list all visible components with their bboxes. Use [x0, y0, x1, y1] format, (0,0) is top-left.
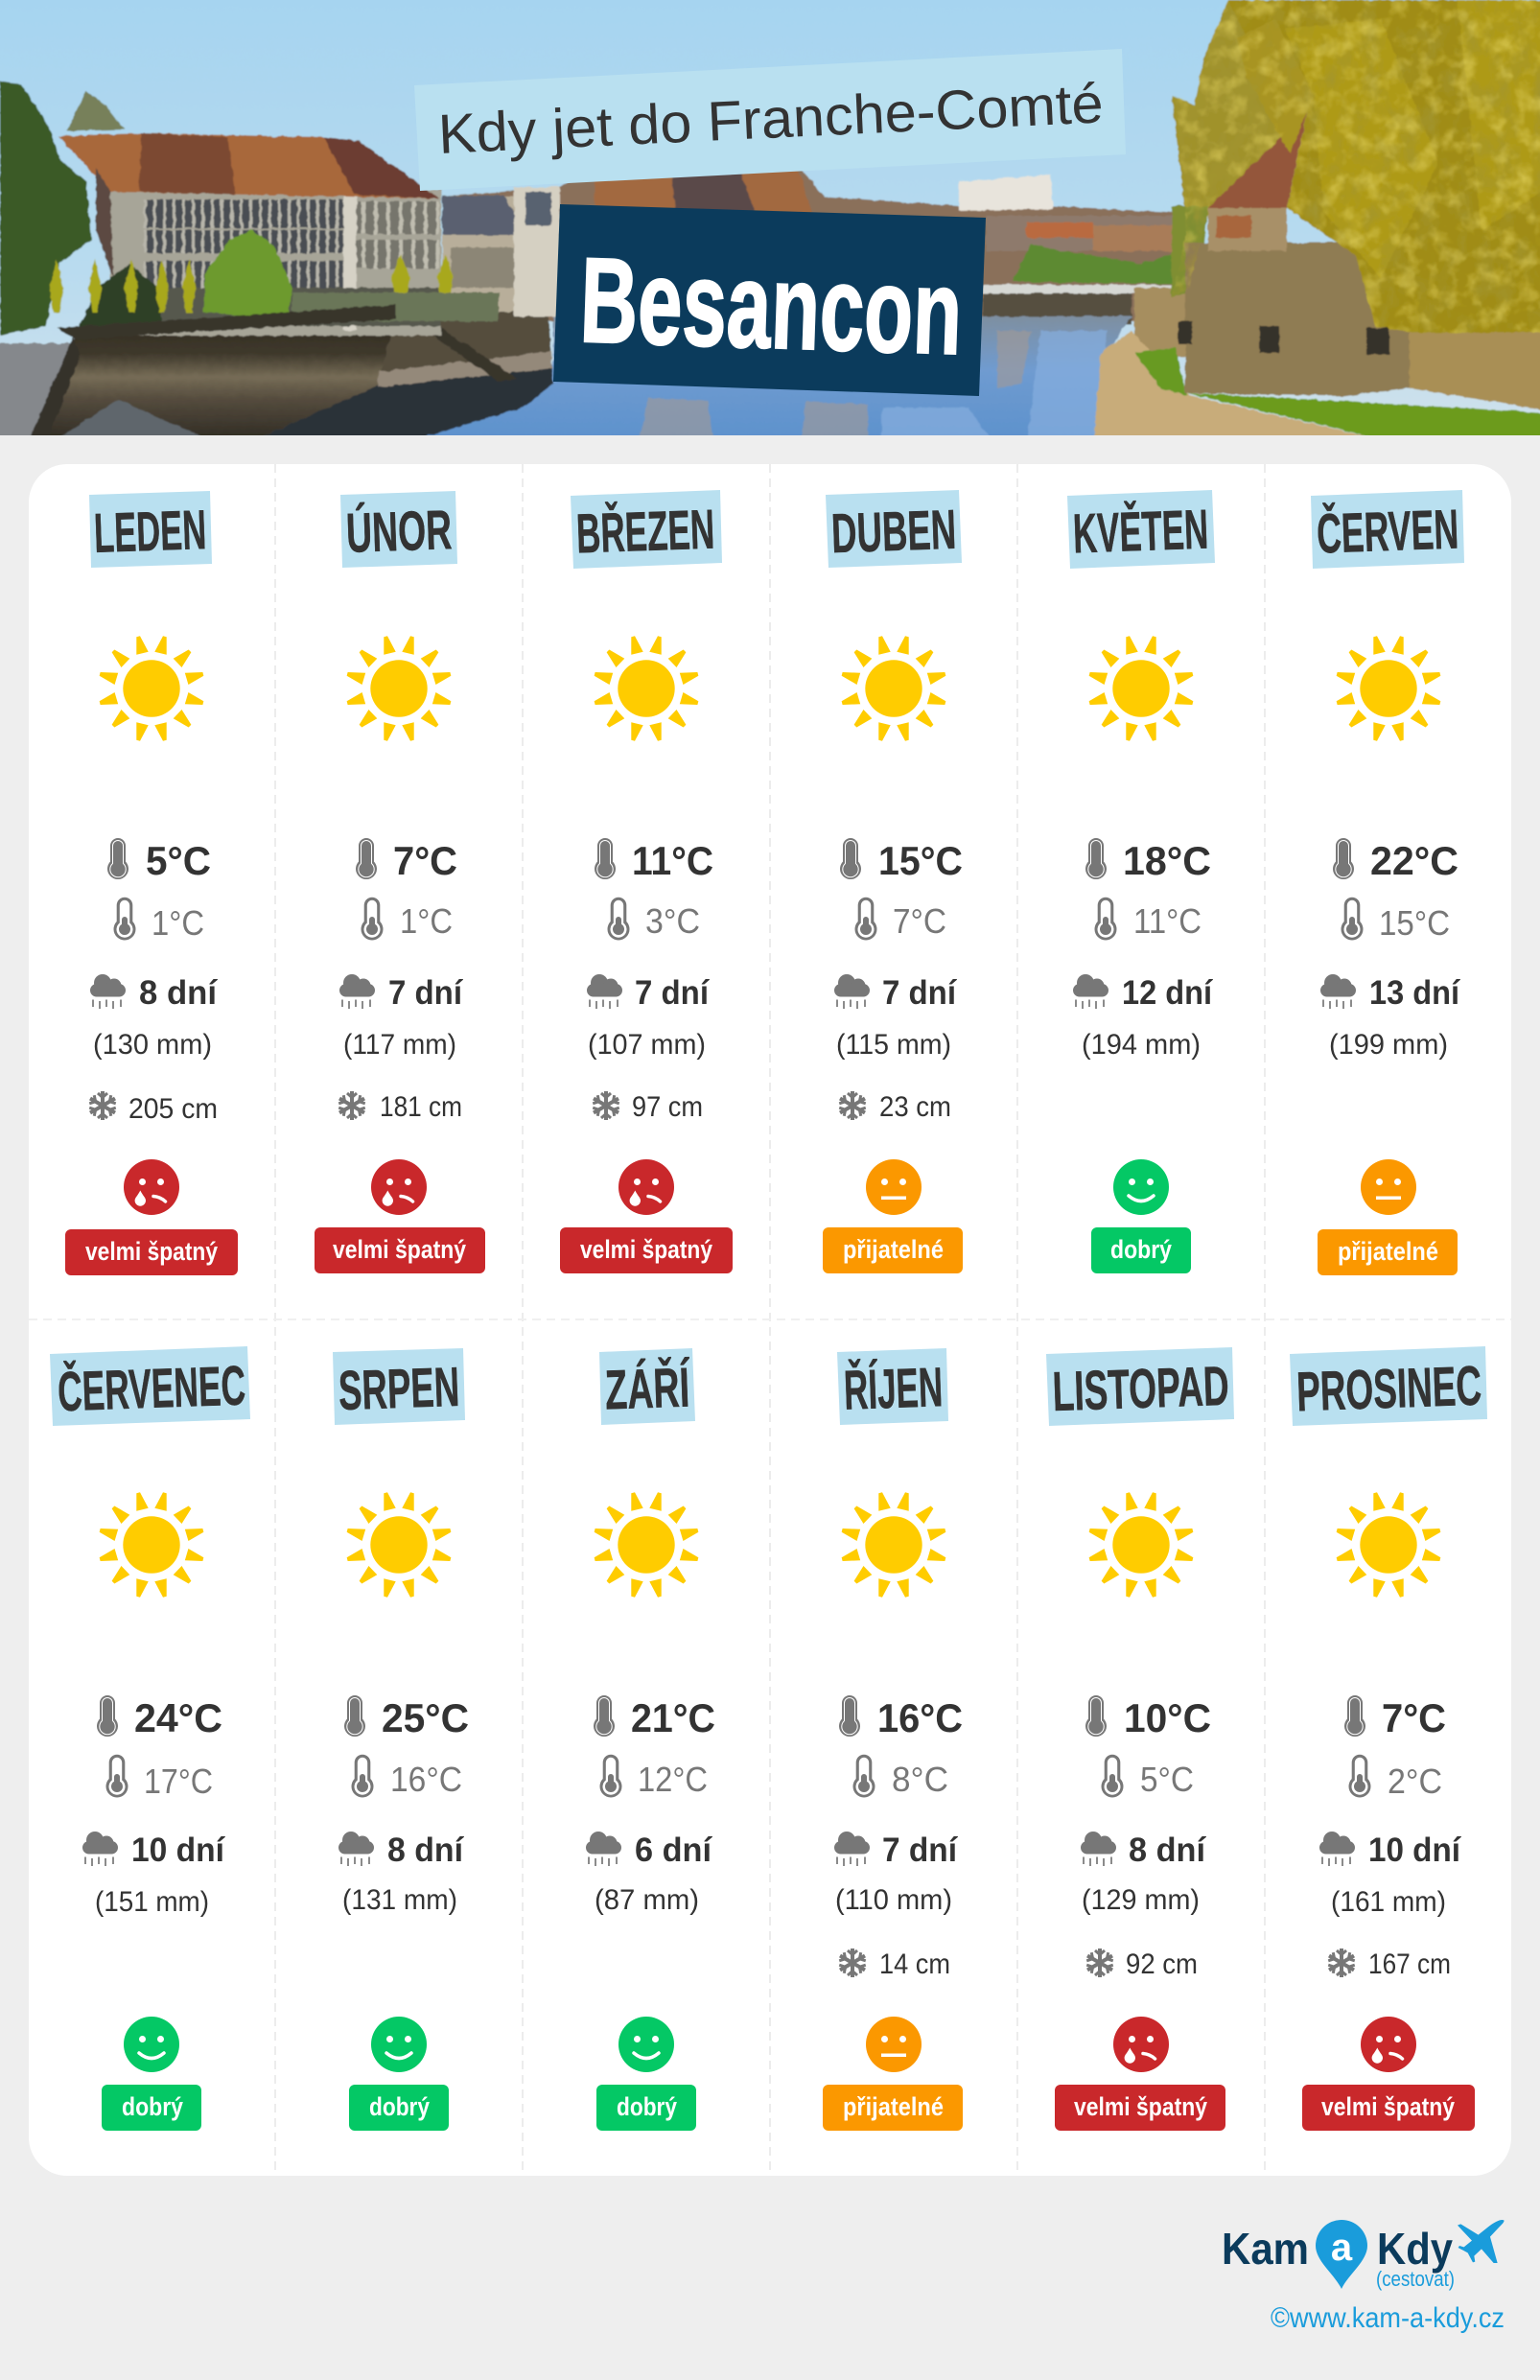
month heading: [837, 1348, 948, 1425]
city name: Besancon: [578, 232, 964, 380]
icon: sun: [346, 636, 452, 741]
card: Prosinec: [1290, 1346, 1487, 2131]
rain days: 8 dní: [1129, 1832, 1206, 1869]
card: Říjen: [823, 1348, 963, 2131]
snowfall: 205 cm: [128, 1093, 218, 1125]
max temperature: 24°C: [134, 1695, 222, 1740]
rainfall: (151 mm): [95, 1886, 209, 1918]
icon: sun: [1088, 636, 1194, 741]
calendar panel: [29, 464, 1511, 2176]
rating badge: [596, 2085, 696, 2131]
snowfall: [838, 1091, 951, 1123]
max temperature: 7°C: [1382, 1695, 1446, 1740]
left building facade: [110, 190, 441, 336]
min temperature: [1348, 1755, 1442, 1801]
rainfall: (110 mm): [835, 1884, 952, 1916]
icon: rating face: [124, 2017, 179, 2072]
snowfall: [1327, 1948, 1451, 1980]
rating badge: velmi špatný: [1321, 2092, 1455, 2121]
icon: rating face: [618, 2017, 674, 2072]
icon: sun: [1336, 636, 1441, 741]
logo: Kam a Kdy: [1222, 2220, 1505, 2291]
icon: sun: [594, 1492, 699, 1598]
right embankment: [1133, 286, 1187, 359]
max temperature: 15°C: [878, 838, 963, 883]
icon: sun: [1088, 1492, 1194, 1598]
max temperature: [1085, 1695, 1211, 1740]
icon: map pin: a: [1331, 2227, 1353, 2269]
min temperature: [855, 898, 946, 941]
front foliage: [1228, 0, 1540, 333]
min temperature: 3°C: [645, 901, 700, 941]
max temperature: 16°C: [877, 1695, 963, 1740]
rating badge: [102, 2085, 201, 2131]
rain days: [339, 974, 463, 1012]
rain days: 7 dní: [882, 1832, 958, 1869]
rainfall: (130 mm): [93, 1029, 212, 1061]
month heading: [89, 491, 212, 568]
min temperature: 2°C: [1388, 1762, 1442, 1801]
rainfall: (107 mm): [588, 1029, 706, 1061]
max temperature: 11°C: [632, 838, 713, 883]
back foliage: [1170, 0, 1282, 222]
rain days: 10 dní: [1368, 1832, 1461, 1869]
min temperature: [105, 1755, 213, 1801]
max temperature: 7°C: [393, 838, 457, 883]
rain days: [1081, 1832, 1206, 1869]
card: Červenec: [50, 1346, 250, 2131]
rain days: 6 dní: [635, 1832, 712, 1869]
max temperature: [839, 1695, 963, 1740]
light blue title banner: [414, 49, 1126, 191]
dark blue city banner: [553, 204, 986, 396]
max temperature: [594, 1695, 715, 1740]
rating badge: přijatelné: [843, 1235, 944, 1264]
logo: Kam a Kdy: Kdy: [1377, 2224, 1453, 2274]
icon: rating face: [866, 2017, 922, 2072]
snowfall: [88, 1091, 218, 1125]
icon: rating face: [618, 1159, 674, 1215]
max temperature: 5°C: [146, 838, 211, 883]
min temperature: 1°C: [400, 901, 453, 941]
max temperature: 22°C: [1370, 838, 1458, 883]
min temperature: [1095, 898, 1202, 941]
max temperature: [107, 838, 211, 883]
rating badge: dobrý: [122, 2092, 183, 2121]
min temperature: 1°C: [152, 903, 204, 943]
month heading: [1311, 490, 1464, 569]
dark reflected water: [263, 367, 554, 435]
rating badge: dobrý: [369, 2092, 430, 2121]
distant town: [442, 163, 1184, 321]
rain days: 10 dní: [131, 1832, 225, 1869]
rating badge: velmi špatný: [580, 1235, 712, 1264]
rain days: [587, 974, 710, 1012]
rating badge: [823, 1227, 963, 1273]
rating badge: velmi špatný: [1074, 2092, 1207, 2121]
icon: sun: [1336, 1492, 1441, 1598]
icon: rating face: [1113, 1159, 1169, 1215]
icon: map pin: [1316, 2220, 1367, 2289]
max temperature: [344, 1695, 469, 1740]
month heading: ČERVENEC: [57, 1355, 246, 1423]
month heading: LISTOPAD: [1052, 1355, 1230, 1423]
icon: sun: [841, 636, 946, 741]
icon: sun: [841, 1492, 946, 1598]
min temperature: [608, 898, 700, 941]
icon: sun: [346, 1492, 452, 1598]
icon: sun: [594, 636, 699, 741]
card: Duben: [823, 490, 963, 1273]
rating badge: [1055, 2085, 1225, 2131]
max temperature: [1085, 838, 1211, 883]
card: Červen: [1311, 490, 1464, 1275]
riverside trees: [203, 230, 292, 321]
rating badge: [560, 1227, 733, 1273]
snowfall: [1085, 1948, 1198, 1980]
icon: rating face: [371, 1159, 427, 1215]
icon: rating face: [124, 1159, 179, 1215]
rainfall: (194 mm): [1082, 1029, 1201, 1061]
rating badge: [349, 2085, 449, 2131]
max temperature: [356, 838, 457, 883]
snowfall: 23 cm: [879, 1091, 951, 1123]
min temperature: [1341, 898, 1450, 943]
rain days: [586, 1832, 712, 1869]
month heading: [50, 1346, 250, 1426]
rain days: 7 dní: [635, 974, 710, 1012]
rating badge: [1302, 2085, 1475, 2131]
min temperature: 7°C: [893, 901, 946, 941]
snowfall: [338, 1091, 462, 1123]
card: Leden: [65, 491, 238, 1275]
month heading: KVĚTEN: [1072, 499, 1209, 565]
rain days: [1319, 1832, 1461, 1869]
month heading: BŘEZEN: [575, 499, 715, 566]
snowfall: 14 cm: [879, 1948, 950, 1980]
rainfall: (131 mm): [342, 1884, 457, 1916]
min temperature: [853, 1755, 948, 1799]
rainfall: (117 mm): [343, 1029, 456, 1061]
card: Listopad: [1046, 1347, 1234, 2131]
min temperature: [113, 898, 204, 943]
min temperature: 11°C: [1133, 901, 1202, 941]
quay wall: [48, 334, 392, 435]
rainfall: (87 mm): [595, 1884, 699, 1916]
month heading: ŘÍJEN: [843, 1356, 944, 1422]
title text: Kdy jet do Franche-Comté: [437, 72, 1105, 166]
min temperature: 5°C: [1140, 1760, 1194, 1799]
max temperature: 21°C: [631, 1695, 715, 1740]
rain days: 13 dní: [1369, 974, 1460, 1012]
header photo: Besancon riverside: [0, 0, 1540, 479]
min temperature: [361, 898, 453, 941]
month heading: [340, 491, 457, 568]
rating badge: přijatelné: [1338, 1237, 1438, 1266]
foliage texture: [1151, 0, 1540, 345]
min temperature: 17°C: [144, 1762, 213, 1801]
month heading: [599, 1348, 695, 1425]
max temperature: [1344, 1695, 1446, 1740]
icon: rating face: [866, 1159, 922, 1215]
website credit: ©www.kam-a-kdy.cz: [1271, 2302, 1505, 2334]
month heading: DUBEN: [830, 499, 957, 565]
rain days: [1320, 974, 1460, 1012]
rain days: [90, 974, 218, 1012]
left building roof: [58, 133, 439, 198]
left tree: [0, 82, 91, 336]
rating badge: [315, 1227, 485, 1273]
rating badge: dobrý: [617, 2092, 677, 2121]
snowfall: 181 cm: [380, 1091, 462, 1123]
snowfall: 167 cm: [1368, 1948, 1451, 1980]
pavement: [0, 341, 71, 435]
rating badge: [1091, 1227, 1191, 1273]
rating badge: [1318, 1229, 1458, 1275]
middle buildings: [441, 196, 516, 314]
river: [426, 315, 1133, 435]
card: Srpen: [333, 1348, 469, 2131]
month heading: ZÁŘÍ: [604, 1356, 691, 1422]
icon: sun: [99, 1492, 204, 1598]
rainfall: (129 mm): [1082, 1884, 1200, 1916]
tower: [1185, 243, 1410, 396]
max temperature: 10°C: [1124, 1695, 1211, 1740]
min temperature: 12°C: [638, 1760, 708, 1799]
max temperature: 18°C: [1123, 838, 1211, 883]
month heading: [1046, 1347, 1234, 1426]
rating badge: dobrý: [1110, 1235, 1172, 1264]
min temperature: [600, 1755, 708, 1799]
rating badge: přijatelné: [843, 2092, 944, 2121]
logo: Kam a Kdy: (cestovat): [1376, 2267, 1455, 2291]
rain days: 8 dní: [387, 1832, 464, 1869]
month heading: LEDEN: [93, 499, 207, 565]
icon: sun: [99, 636, 204, 741]
rain days: [834, 974, 957, 1012]
max temperature: [1333, 838, 1458, 883]
min temperature: [1101, 1755, 1194, 1799]
card: Září: [586, 1348, 715, 2131]
snowfall: [592, 1091, 703, 1123]
rainfall: (115 mm): [836, 1029, 951, 1061]
month heading: [1067, 490, 1215, 569]
card: Květen: [1067, 490, 1215, 1273]
rain days: [1073, 974, 1213, 1012]
rain days: [82, 1832, 225, 1869]
rain days: 7 dní: [388, 974, 463, 1012]
snowfall: 92 cm: [1126, 1948, 1198, 1980]
icon: rating face: [1361, 1159, 1416, 1215]
icon: rating face: [371, 2017, 427, 2072]
max temperature: [97, 1695, 222, 1740]
max temperature: [595, 838, 713, 883]
max temperature: 25°C: [382, 1695, 469, 1740]
min temperature: 8°C: [892, 1760, 948, 1799]
rating badge: [65, 1229, 238, 1275]
rainfall: (161 mm): [1331, 1886, 1446, 1918]
rain days: 8 dní: [139, 974, 218, 1012]
card: Únor: [315, 491, 485, 1273]
snowfall: [838, 1948, 950, 1980]
icon: airplane: [1458, 2220, 1505, 2263]
min temperature: [351, 1755, 462, 1799]
month heading: [333, 1348, 465, 1425]
month heading: SRPEN: [338, 1356, 460, 1422]
icon: rating face: [1361, 2017, 1416, 2072]
month heading: [571, 490, 722, 569]
logo: Kam a Kdy: Kam: [1222, 2224, 1309, 2274]
rating badge: velmi špatný: [85, 1237, 218, 1266]
rating badge: velmi špatný: [333, 1235, 466, 1264]
rating badge: [823, 2085, 963, 2131]
min temperature: 15°C: [1379, 903, 1450, 943]
rain days: [338, 1832, 464, 1869]
rain days: [834, 1832, 958, 1869]
month heading: ÚNOR: [345, 499, 453, 565]
min temperature: 16°C: [390, 1760, 462, 1799]
rain days: 7 dní: [882, 974, 957, 1012]
icon: rating face: [1113, 2017, 1169, 2072]
rain days: 12 dní: [1122, 974, 1213, 1012]
snowfall: 97 cm: [632, 1091, 703, 1123]
card: Březen: [560, 490, 733, 1273]
max temperature: [840, 838, 963, 883]
rainfall: (199 mm): [1329, 1029, 1448, 1061]
month heading: [826, 490, 962, 568]
